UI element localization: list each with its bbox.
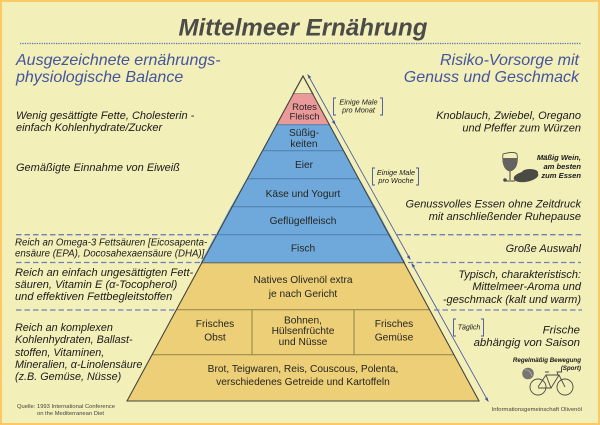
wine text: Mäßig Wein, xyxy=(537,153,581,162)
pyramid labels: Eier xyxy=(295,160,314,171)
wine text: am besten xyxy=(543,162,581,171)
left text: carbohydrates: Reich an komplexen xyxy=(15,322,113,334)
right text blocks: Typisch, charakteristisch: xyxy=(458,269,581,281)
pyramid labels: Käse und Yogurt xyxy=(266,189,341,200)
right text blocks xyxy=(406,110,582,349)
dashed dividers xyxy=(16,235,582,310)
left text: omega-3 xyxy=(15,238,208,260)
bracket: monthly: pro Monat xyxy=(341,106,376,114)
wine text: zum Essen xyxy=(540,171,581,180)
pyramid labels: Frisches xyxy=(196,319,234,330)
pyramid labels: Gemüse xyxy=(375,332,414,344)
bracket: weekly: Einige Male xyxy=(377,168,415,177)
pyramid labels: je nach Gericht xyxy=(268,289,337,300)
pyramid separators xyxy=(127,76,479,401)
layer: fish xyxy=(201,235,405,262)
pyramid labels: Süßig- xyxy=(289,128,319,139)
title: Mittelmeer Ernährung xyxy=(178,14,428,42)
left text blocks: Wenig gesättigte Fette, Cholesterin - xyxy=(16,110,195,122)
layer: fruit, legumes, vegetables xyxy=(152,310,454,354)
pyramid labels: verschiedenes Getreide und Kartoffeln xyxy=(216,377,390,388)
right text blocks: Mittelmeer-Aroma und xyxy=(472,281,582,293)
pyramid labels: Frisches xyxy=(375,319,413,330)
layer: red meat xyxy=(276,94,330,124)
source note: on the Mediterranean Diet xyxy=(37,411,104,417)
heading: left: Ausgezeichnete ernährungs- xyxy=(15,52,221,69)
layer: poultry xyxy=(216,207,390,234)
heading: right: Genuss und Geschmack xyxy=(404,69,580,86)
left text blocks: Gemäßigte Einnahme von Eiweiß xyxy=(16,162,180,174)
layer: sweets xyxy=(262,125,344,150)
exercise text: (Sport) xyxy=(561,365,581,372)
layer: eggs xyxy=(247,151,359,178)
left text: carbohydrates: Kohlenhydraten, Ballast- xyxy=(15,334,133,346)
bracket: monthly: Einige Male xyxy=(339,98,378,106)
pyramid labels: und Nüsse xyxy=(279,337,328,348)
layer: olive oil xyxy=(176,263,430,310)
credit: Informationsgemeinschaft Olivenöl xyxy=(492,407,582,413)
left text: carbohydrates xyxy=(15,322,142,383)
right text blocks: -geschmack (kalt und warm) xyxy=(443,294,581,306)
layer: bread and grains xyxy=(127,355,479,401)
pyramid labels: Geflügelfleisch xyxy=(270,216,336,227)
left text: carbohydrates: Mineralien, α-Linolensäure xyxy=(15,359,142,371)
left text: unsaturated fats: und effektiven Fettbegleitstoffen xyxy=(15,291,172,303)
right text blocks: Genussvolles Essen ohne Zeitdruck xyxy=(406,198,581,210)
bracket: weekly: pro Woche xyxy=(377,176,414,185)
pyramid labels: Bohnen, xyxy=(284,316,322,326)
pyramid labels: Fisch xyxy=(291,244,315,254)
pyramid labels: Hülsenfrüchte xyxy=(272,326,335,337)
bracket: daily: Täglich xyxy=(458,324,480,332)
left text: unsaturated fats: säuren, Vitamin E (α-Tocopherol) xyxy=(15,279,178,291)
source note xyxy=(17,404,115,417)
right text blocks: mit anschließender Ruhepause xyxy=(429,211,581,223)
icon: wine glass and grapes xyxy=(502,152,539,184)
layer: cheese and yogurt xyxy=(231,179,375,206)
right text blocks: Große Auswahl xyxy=(506,243,582,255)
bracket: daily xyxy=(454,319,484,336)
exercise text: Regelmäßig Bewegung xyxy=(513,357,581,364)
frequency arrows xyxy=(308,75,488,401)
pyramid labels: keiten xyxy=(290,139,318,150)
bracket: weekly xyxy=(372,168,418,185)
wine text xyxy=(537,153,581,180)
pyramid xyxy=(127,76,479,401)
left text blocks xyxy=(16,110,195,174)
pyramid labels: Fleisch xyxy=(289,112,320,122)
heading: right: Risiko-Vorsorge mit xyxy=(440,52,580,69)
pyramid labels: Rotes xyxy=(292,102,317,113)
left text: unsaturated fats: Reich an einfach ungesättigten Fett- xyxy=(15,267,194,279)
left text: omega-3: Reich an Omega-3 Fettsäuren [Eicosapenta- xyxy=(15,238,208,248)
left text: carbohydrates: stoffen, Vitaminen, xyxy=(15,347,104,359)
exercise text xyxy=(513,357,581,372)
pyramid labels: Obst xyxy=(204,332,226,344)
bracket: monthly xyxy=(334,98,382,115)
right text blocks: abhängig von Saison xyxy=(474,337,580,349)
pyramid labels: Brot, Teigwaren, Reis, Couscous, Polenta, xyxy=(208,364,398,375)
left text: omega-3: ensäure (EPA), Docosahexaensäure (DHA)] xyxy=(15,248,205,260)
left text: carbohydrates: (z.B. Gemüse, Nüsse) xyxy=(15,371,121,383)
pyramid tip xyxy=(293,76,313,94)
left text blocks: einfach Kohlenhydrate/Zucker xyxy=(16,122,163,134)
right text blocks: Frische xyxy=(543,324,580,336)
right text blocks: und Pfeffer zum Würzen xyxy=(462,122,581,134)
pyramid labels: Natives Olivenöl extra xyxy=(253,275,353,286)
pyramid labels xyxy=(196,102,414,388)
heading: right xyxy=(404,52,580,86)
right text blocks: Knoblauch, Zwiebel, Oregano xyxy=(436,110,581,122)
heading: left: physiologische Balance xyxy=(15,69,183,86)
icon: ball and bicycle xyxy=(522,368,573,395)
heading: left xyxy=(15,52,221,86)
left text: unsaturated fats xyxy=(15,267,194,303)
source note: Quelle: 1993 International Conference xyxy=(17,404,115,410)
